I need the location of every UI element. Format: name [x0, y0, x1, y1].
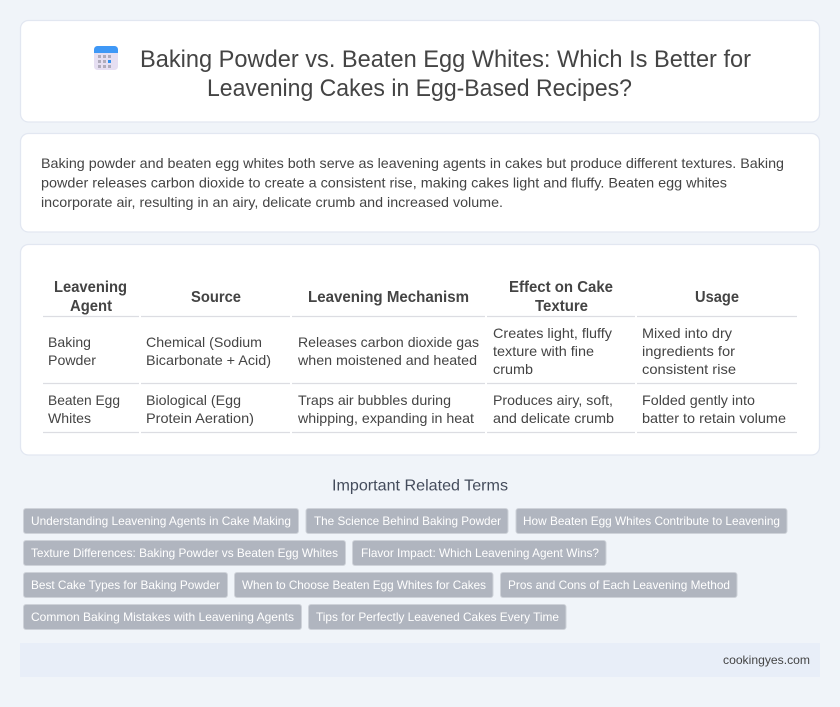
footer: cookingyes.com — [723, 653, 810, 667]
table row: beaten egg whites: batter to retain volume — [642, 410, 786, 426]
table row: beaten egg whites: and delicate crumb — [493, 410, 614, 426]
table row: baking powder: texture with fine — [493, 343, 594, 359]
panel: related term tags — [24, 508, 787, 630]
tag: Pros and Cons of Each Leavening Method — [508, 578, 730, 592]
table row: baking powder: ingredients for — [642, 343, 735, 359]
tag — [24, 508, 298, 534]
table header row: Effect on Cake — [509, 279, 613, 296]
table row: baking powder: when moistened and heated — [297, 352, 477, 368]
tag — [352, 540, 606, 566]
tag — [306, 508, 508, 534]
tag — [234, 572, 493, 598]
table header row — [43, 279, 797, 316]
tag — [516, 508, 787, 534]
table row: baking powder: consistent rise — [642, 361, 736, 377]
table row: baking powder: Creates light, fluffy — [493, 325, 612, 341]
tag: Understanding Leavening Agents in Cake Making — [31, 514, 291, 528]
table header row: Leavening — [54, 279, 127, 296]
table header row: Usage — [695, 289, 739, 306]
tag: When to Choose Beaten Egg Whites for Cakes — [242, 578, 486, 592]
panel: comparison table — [20, 244, 820, 455]
table row: beaten egg whites — [43, 392, 797, 432]
table row: beaten egg whites: Produces airy, soft, — [493, 392, 613, 408]
table row: beaten egg whites: Beaten Egg — [48, 392, 120, 408]
table row: beaten egg whites: whipping, expanding in heat — [297, 410, 474, 426]
tag — [500, 572, 737, 598]
tag — [24, 604, 302, 630]
table row: baking powder: Baking — [48, 334, 91, 350]
table header row: Agent — [70, 298, 113, 315]
panel: title header — [20, 20, 820, 122]
table row: beaten egg whites: Protein Aeration) — [146, 410, 254, 426]
table row: baking powder: Mixed into dry — [642, 325, 732, 341]
tag — [308, 604, 566, 630]
tag: Best Cake Types for Baking Powder — [31, 578, 220, 592]
heading: title: Baking Powder vs. Beaten Egg Whites: Which Is Better for — [140, 46, 751, 73]
table row: beaten egg whites: Whites — [48, 410, 91, 426]
table header row: Leavening Mechanism — [308, 289, 469, 306]
heading: title: Leavening Cakes in Egg-Based Recipes? — [207, 75, 632, 102]
table row: baking powder: Powder — [48, 352, 96, 368]
tag: The Science Behind Baking Powder — [314, 514, 501, 528]
table header row: Texture — [535, 298, 588, 315]
table row: beaten egg whites: Traps air bubbles during — [298, 392, 451, 408]
tag: Common Baking Mistakes with Leavening Agents — [31, 610, 294, 624]
tag: Texture Differences: Baking Powder vs Beaten Egg Whites — [31, 546, 338, 560]
heading: title — [140, 46, 751, 102]
text block: description: incorporate air, resulting in an airy, delicate crumb and increased volume. — [41, 194, 503, 210]
text block: description: powder releases carbon dioxide to create a consistent rise, making cakes light and fluffy. Beaten egg whites — [41, 174, 727, 190]
heading: important related terms: Important Related Terms — [332, 478, 508, 494]
tag: Tips for Perfectly Leavened Cakes Every Time — [316, 610, 559, 624]
footer — [20, 643, 820, 677]
tag: How Beaten Egg Whites Contribute to Leavening — [523, 514, 780, 528]
tag — [24, 540, 346, 566]
text block: description: Baking powder and beaten egg whites both serve as leavening agents in cakes but produce different textures. Baking — [41, 155, 784, 171]
panel: description — [20, 134, 820, 232]
text block: description — [41, 155, 784, 210]
tag: Flavor Impact: Which Leavening Agent Wins? — [361, 546, 599, 560]
table row: baking powder: crumb — [493, 361, 533, 377]
table row: beaten egg whites: Folded gently into — [642, 392, 755, 408]
tag — [24, 572, 228, 598]
table header row: Source — [191, 289, 241, 306]
table row: baking powder: Bicarbonate + Acid) — [146, 352, 271, 368]
table row: baking powder: Releases carbon dioxide gas — [298, 334, 479, 350]
table row: baking powder: Chemical (Sodium — [146, 334, 262, 350]
table row: baking powder — [43, 325, 797, 384]
table row: beaten egg whites: Biological (Egg — [146, 392, 241, 408]
icon: calendar — [94, 46, 118, 70]
